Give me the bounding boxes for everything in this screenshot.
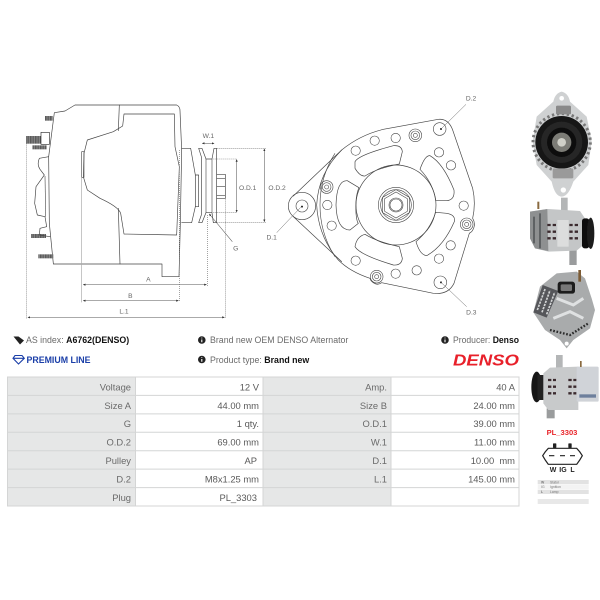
dimension labels: A bbox=[146, 277, 151, 284]
pin legend: L bbox=[541, 490, 543, 494]
side view technical drawing bbox=[26, 105, 266, 318]
pin labels bbox=[550, 467, 575, 474]
icon: info bbox=[198, 356, 206, 363]
row: voltage and amp: 40 A bbox=[496, 381, 516, 392]
dimension labels: W.1 bbox=[203, 133, 214, 140]
row: D.2 and L.1: M8x1.25 mm bbox=[205, 473, 259, 484]
front view labels bbox=[266, 96, 477, 317]
pin labels: W bbox=[550, 467, 557, 474]
info: product type: Product type: Brand new bbox=[210, 355, 309, 365]
plug name: PL_3303 bbox=[547, 428, 577, 437]
row: O.D.2 and W.1: 69.00 mm bbox=[217, 437, 259, 448]
row: pulley and D.1 bbox=[105, 455, 515, 466]
row: G and O.D.1: 39.00 mm bbox=[473, 418, 515, 429]
dimension labels: G bbox=[233, 245, 238, 252]
row: G and O.D.1: G bbox=[124, 418, 131, 429]
row: D.2 and L.1 bbox=[116, 473, 515, 484]
dimension labels: B bbox=[128, 293, 133, 300]
row: G and O.D.1 bbox=[124, 418, 515, 429]
pin legend: W bbox=[541, 480, 545, 484]
flange holes bbox=[323, 133, 468, 278]
photo: alternator front bbox=[533, 92, 592, 197]
dimension labels bbox=[119, 133, 257, 315]
row: plug: PL_3303 bbox=[219, 492, 257, 503]
screws bbox=[320, 129, 473, 283]
central housing and nut bbox=[356, 165, 436, 245]
icon: info bbox=[441, 336, 449, 344]
row: O.D.2 and W.1: O.D.2 bbox=[106, 437, 131, 448]
row: D.2 and L.1: L.1 bbox=[374, 473, 387, 484]
row: size A and size B: Size A bbox=[104, 400, 132, 411]
alternator body outline bbox=[49, 105, 182, 277]
info: premium line: PREMIUM LINE bbox=[26, 355, 91, 365]
front view labels: D.2 bbox=[466, 96, 476, 103]
info: producer: Producer: Denso bbox=[453, 335, 520, 345]
table background bbox=[8, 377, 519, 506]
front view labels: D.3 bbox=[466, 310, 477, 317]
row: O.D.2 and W.1 bbox=[106, 437, 515, 448]
row: voltage and amp: 12 V bbox=[240, 381, 260, 392]
row: voltage and amp: Voltage bbox=[100, 381, 131, 392]
row: size A and size B: Size B bbox=[360, 400, 387, 411]
info: AS index: AS index: A6762(DENSO) bbox=[26, 335, 129, 345]
row: size A and size B bbox=[104, 400, 515, 411]
row: D.2 and L.1: D.2 bbox=[116, 473, 131, 484]
row: voltage and amp: Amp. bbox=[365, 381, 387, 392]
row: O.D.2 and W.1: W.1 bbox=[371, 437, 387, 448]
icon: diamond bbox=[13, 356, 24, 364]
row: pulley and D.1: AP bbox=[244, 455, 257, 466]
front view technical drawing bbox=[266, 96, 477, 317]
info: brand new OEM: Brand new OEM DENSO Alternator bbox=[210, 335, 348, 345]
row: D.2 and L.1: 145.00 mm bbox=[468, 473, 515, 484]
front view labels: D.1 bbox=[266, 234, 277, 241]
row: voltage and amp bbox=[100, 381, 516, 392]
pin legend: Stator bbox=[550, 480, 560, 484]
row: pulley and D.1: 10.00 mm bbox=[471, 455, 515, 466]
mounting holes with leaders bbox=[277, 104, 467, 307]
rear cover and terminals bbox=[26, 116, 53, 258]
specification table bbox=[8, 377, 519, 506]
pin legend: Lamp bbox=[550, 490, 559, 494]
row: G and O.D.1: O.D.1 bbox=[362, 418, 387, 429]
photo: alternator side right bbox=[530, 198, 594, 265]
ventilation slots bbox=[336, 146, 455, 265]
dimension lines bbox=[27, 143, 266, 318]
plug diagram bbox=[538, 428, 589, 504]
pin legend: Ignition bbox=[550, 485, 561, 489]
photo: alternator rear bbox=[533, 270, 595, 348]
photo: alternator side left bbox=[531, 355, 599, 418]
pin labels: L bbox=[570, 467, 575, 474]
flange outline bbox=[288, 119, 474, 294]
front view labels: O.D.2 bbox=[268, 185, 286, 192]
row: O.D.2 and W.1: 11.00 mm bbox=[474, 437, 515, 448]
connector icon bbox=[543, 443, 582, 464]
row: plug: Plug bbox=[112, 492, 131, 503]
row: plug bbox=[112, 492, 257, 503]
pin legend bbox=[538, 480, 589, 504]
row: pulley and D.1: D.1 bbox=[372, 455, 387, 466]
icon: tags bbox=[14, 336, 24, 344]
pin labels: IG bbox=[559, 467, 567, 474]
row: size A and size B: 44.00 mm bbox=[217, 400, 259, 411]
pulley bbox=[182, 148, 225, 223]
icon: info bbox=[198, 336, 206, 344]
row: pulley and D.1: Pulley bbox=[105, 455, 131, 466]
logo: DENSO: DENSO bbox=[453, 352, 520, 370]
pin legend: IG bbox=[541, 485, 545, 489]
dimension labels: L.1 bbox=[119, 308, 129, 315]
row: G and O.D.1: 1 qty. bbox=[237, 418, 259, 429]
row: size A and size B: 24.00 mm bbox=[473, 400, 515, 411]
dimension labels: O.D.1 bbox=[239, 185, 257, 192]
